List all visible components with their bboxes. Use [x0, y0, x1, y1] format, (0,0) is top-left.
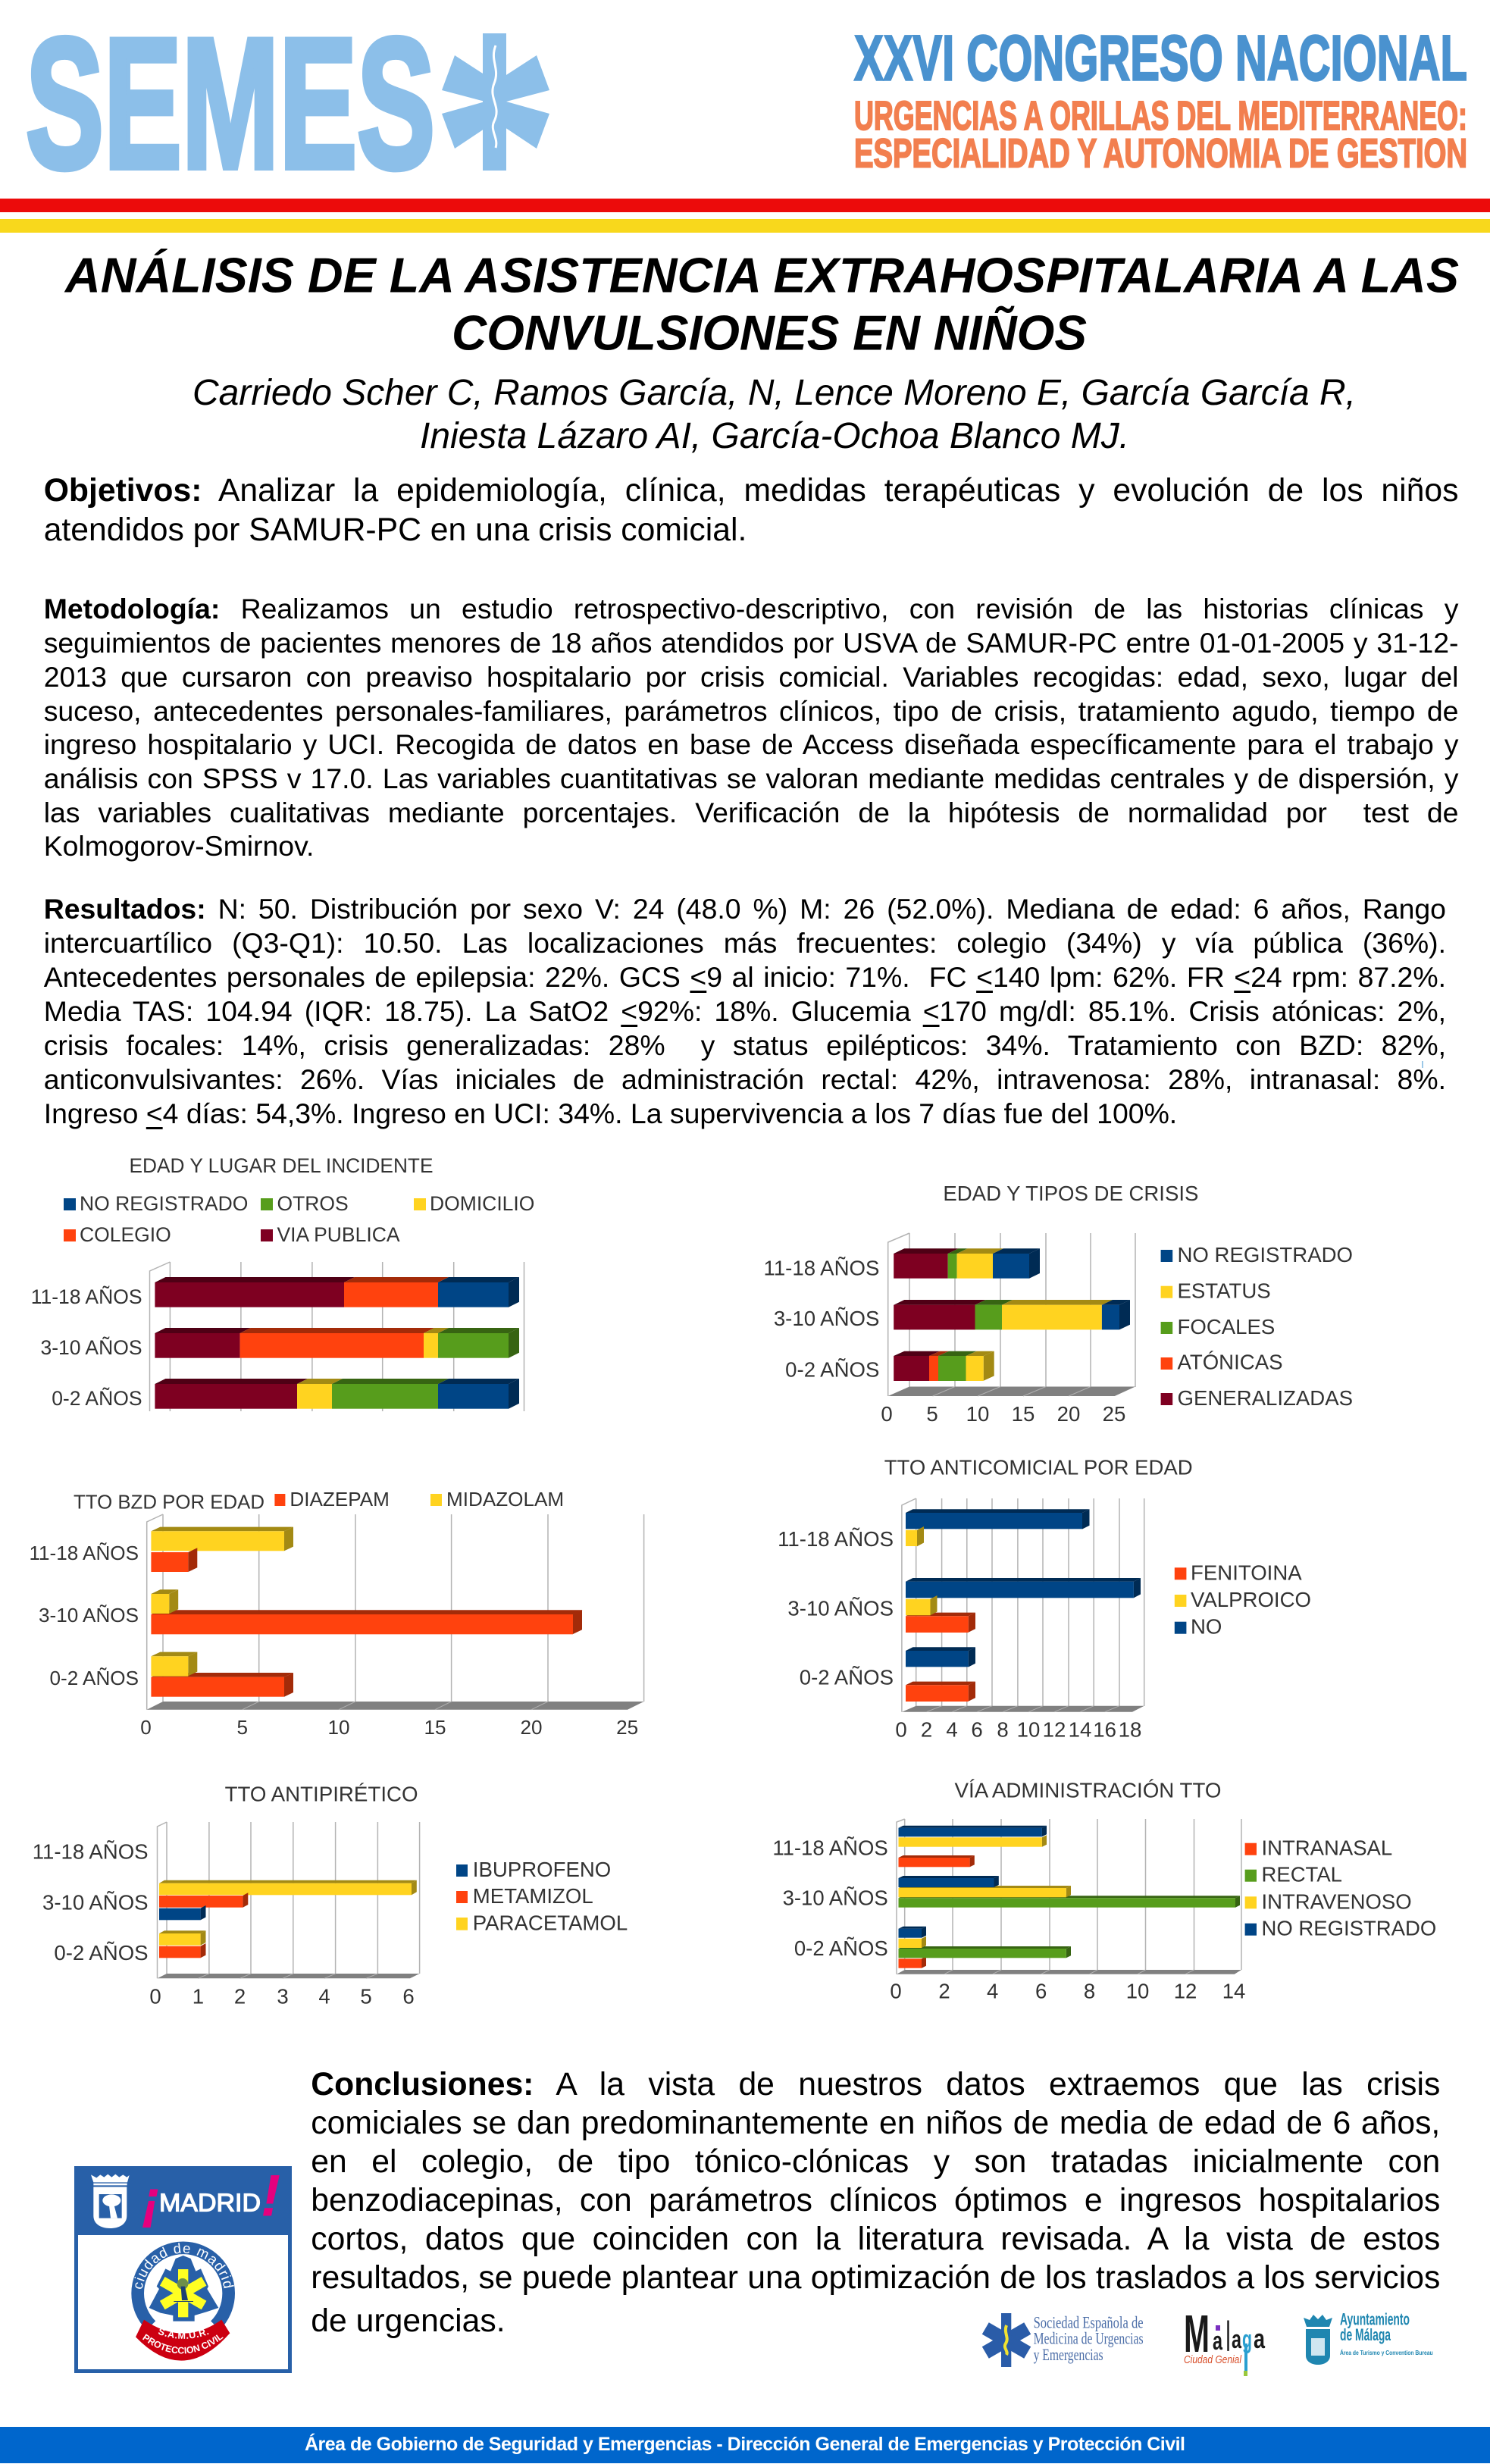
- axis labels: 8: [997, 1718, 1009, 1742]
- small blue mark: [1422, 1061, 1423, 1068]
- legend: NO REGISTRADO: [1178, 1243, 1353, 1266]
- axis labels: [895, 1718, 1141, 1742]
- bar: 0-2 años: [894, 1351, 994, 1381]
- category labels: 11-18 AÑOS: [772, 1836, 888, 1859]
- axis labels: 2: [234, 1984, 246, 2008]
- logo: málaga ciudad genial: l: [1226, 2312, 1230, 2360]
- bar: 3-10 años midazolam: [151, 1589, 178, 1614]
- authors: Carriedo Scher C, Ramos García, N, Lence Moreno E, García García R,: [193, 372, 1356, 413]
- floor: [888, 1387, 1135, 1396]
- text block: conclusiones: [311, 2066, 1440, 2339]
- bar: 11-18 años no registrado: [899, 1826, 1047, 1836]
- category labels: 0-2 AÑOS: [794, 1936, 888, 1960]
- bar: 3-10 años no registrado: [899, 1876, 999, 1887]
- logo: ayuntamiento de málaga: de Málaga: [1340, 2325, 1391, 2344]
- bar: 3-10 años valproico: [906, 1595, 937, 1615]
- text block: metodología: 2013 que cursaron con preaviso hospitalario por crisis comicial. Variables recogidas: edad, sexo, lugar del: [44, 661, 1458, 693]
- axis labels: [149, 1984, 415, 2008]
- text block: resultados: crisis focales: 14%, crisis generalizadas: 28% y status epilépticos: 34%. Tratamiento con BZD: 82%,: [44, 1029, 1446, 1061]
- logo: málaga ciudad genial: Ciudad Genial: [1184, 2353, 1242, 2366]
- axis labels: 5: [926, 1402, 938, 1426]
- text block: resultados: anticonvulsivantes: 26%. Vías iniciales de administración rectal: 42%, intravenosa: 28%, intranasal: 8%.: [44, 1063, 1446, 1095]
- chart title: VÍA ADMINISTRACIÓN TTO: [955, 1779, 1222, 1802]
- chart title: TTO ANTIPIRÉTICO: [225, 1783, 418, 1806]
- gridlines: [147, 1514, 644, 1710]
- icon: blue star of life: [982, 2313, 1031, 2367]
- text block: objetivos: Objetivos: Analizar la epidemiología, clínica, medidas terapéuticas y evolución de los niños: [44, 472, 1458, 509]
- title: ANÁLISIS DE LA ASISTENCIA EXTRAHOSPITALARIA A LAS: [64, 249, 1459, 303]
- bar: 3-10 años paracetamol: [159, 1880, 417, 1895]
- bar: 0-2 años: [155, 1379, 519, 1409]
- banner text: S.A.M.U.R.: [158, 2328, 209, 2339]
- text block: conclusiones: cortos, datos que coinciden con la literatura revisada. A la vista de estos: [311, 2221, 1440, 2257]
- chart title: TTO BZD POR EDAD: [74, 1491, 265, 1514]
- bar: 0-2 años intravenoso: [899, 1936, 926, 1948]
- authors: Iniesta Lázaro AI, García-Ochoa Blanco MJ.: [420, 415, 1129, 456]
- samur ring: [138, 2248, 229, 2325]
- legend: [1161, 1243, 1353, 1410]
- chart: vía administración tto: [772, 1779, 1436, 2003]
- legend: NO REGISTRADO: [1261, 1917, 1436, 1940]
- logo: málaga ciudad genial: a: [1254, 2323, 1266, 2354]
- text block: objetivos: atendidos por SAMUR-PC en una crisis comicial.: [44, 512, 747, 548]
- floor: [147, 1702, 644, 1710]
- axis labels: 6: [402, 1984, 415, 2008]
- axis labels: 4: [318, 1984, 330, 2008]
- category labels: [31, 1285, 142, 1410]
- legend: INTRAVENOSO: [1261, 1889, 1412, 1913]
- axis labels: 14: [1069, 1718, 1091, 1742]
- category labels: 0-2 AÑOS: [800, 1666, 894, 1689]
- category labels: 3-10 AÑOS: [39, 1604, 139, 1626]
- axis labels: 10: [327, 1716, 350, 1739]
- legend: [274, 1488, 564, 1511]
- text block: metodología: las variables cualitativas mediante porcentajes. Verificación de la hipótesis de normalidad por test de: [44, 797, 1458, 828]
- text block: objetivos: [44, 472, 1458, 548]
- bar: 0-2 años no registrado: [899, 1927, 926, 1938]
- text block: metodología: suceso, antecedentes personales-familiares, parámetros clínicos, tipo de crisis, tratamiento agudo, tiempo de: [44, 694, 1458, 726]
- legend: DIAZEPAM: [290, 1488, 390, 1511]
- ring text: ciudad de madrid: [134, 2243, 234, 2289]
- banner text: PROTECCION CIVIL: [142, 2334, 224, 2354]
- legend: METAMIZOL: [473, 1884, 593, 1908]
- text block: conclusiones: Conclusiones: A la vista de nuestros datos extraemos que las crisis: [311, 2066, 1440, 2102]
- axis labels: 12: [1174, 1980, 1197, 2003]
- axis labels: 10: [1126, 1980, 1149, 2003]
- axis labels: 2: [921, 1718, 932, 1742]
- bar: 3-10 años rectal: [899, 1896, 1240, 1908]
- frame: [74, 2166, 292, 2373]
- axis labels: 14: [1222, 1980, 1245, 2003]
- logo: málaga ciudad genial: g: [1242, 2325, 1252, 2354]
- text block: metodología: Metodología: Realizamos un estudio retrospectivo-descriptivo, con revisión de las historias clínicas y: [44, 593, 1458, 625]
- bar: 11-18 años intravenoso: [899, 1835, 1047, 1847]
- axis labels: 15: [1012, 1402, 1035, 1426]
- gridlines: [158, 1822, 420, 1978]
- category labels: 11-18 AÑOS: [33, 1840, 149, 1864]
- logo: málaga ciudad genial: a: [1232, 2325, 1242, 2354]
- bar: 3-10 años metamizol: [159, 1893, 248, 1908]
- bar: 11-18 años no: [906, 1509, 1090, 1529]
- legend: [1175, 1561, 1311, 1639]
- axis labels: 1: [193, 1984, 204, 2008]
- legend: PARACETAMOL: [473, 1911, 628, 1935]
- legend: NO: [1191, 1615, 1222, 1639]
- text block: metodología: ingreso hospitalario y UCI. Recogida de datos en base de Access diseñada específicamente para el trabajo y: [44, 728, 1458, 760]
- legend: RECTAL: [1261, 1863, 1342, 1886]
- category labels: 11-18 AÑOS: [31, 1285, 142, 1308]
- legend: MIDAZOLAM: [446, 1488, 564, 1511]
- legend: GENERALIZADAS: [1178, 1386, 1353, 1410]
- bar: 3-10 años: [155, 1328, 519, 1358]
- chart: tto bzd por edad: [29, 1488, 644, 1739]
- axis labels: 0: [149, 1984, 161, 2008]
- logo: ayuntamiento de málaga: Área de Turismo y Convention Bureau: [1340, 2350, 1433, 2356]
- floor: [158, 1974, 420, 1978]
- axis labels: 0: [140, 1716, 152, 1739]
- bar: 11-18 años valproico: [906, 1526, 924, 1546]
- bar: 3-10 años intravenoso: [899, 1886, 1071, 1897]
- axis labels: 20: [520, 1716, 543, 1739]
- category labels: 0-2 AÑOS: [785, 1358, 879, 1382]
- category labels: 11-18 AÑOS: [764, 1257, 879, 1280]
- bar: 0-2 años fenitoina: [906, 1682, 975, 1702]
- bar: 3-10 años diazepam: [151, 1610, 583, 1634]
- bear and tree figure: [174, 2278, 193, 2302]
- society name: y Emergencias: [1034, 2345, 1103, 2364]
- axis labels: 6: [971, 1718, 983, 1742]
- logo: SEMES: SEMES: [26, 0, 435, 207]
- text block: conclusiones: comiciales se dan predominantemente en niños de media de edad de 6 años,: [311, 2105, 1440, 2141]
- text block: resultados: Media TAS: 104.94 (IQR: 18.75). La SatO2 <92%: 18%. Glucemia <170 mg/dl: 85.1%. Crisis atónicas: 2%,: [44, 995, 1446, 1027]
- category labels: 3-10 AÑOS: [774, 1307, 879, 1330]
- axis labels: [881, 1402, 1125, 1426]
- gridlines: [888, 1233, 1135, 1396]
- axis labels: 20: [1057, 1402, 1080, 1426]
- legend: NO REGISTRADO: [80, 1192, 248, 1215]
- legend: OTROS: [277, 1192, 349, 1215]
- bar: 0-2 años paracetamol: [159, 1930, 206, 1946]
- category labels: 0-2 AÑOS: [50, 1667, 139, 1689]
- icon: star of life: [442, 33, 549, 171]
- chart: tto antipirético: [33, 1783, 628, 2008]
- category labels: [33, 1840, 149, 1965]
- chart: tto anticomicial por edad: [778, 1456, 1311, 1742]
- text block: resultados: intercuartílico (Q3-Q1): 10.50. Las localizaciones más frecuentes: colegio (34%) y vía pública (36%).: [44, 927, 1446, 959]
- category labels: 3-10 AÑOS: [40, 1336, 142, 1359]
- gridlines: [150, 1262, 524, 1411]
- logo: málaga ciudad genial: [1184, 2304, 1266, 2376]
- text block: metodología: [44, 593, 1458, 862]
- legend: ATÓNICAS: [1178, 1351, 1283, 1374]
- society name: Medicina de Urgencias: [1034, 2329, 1144, 2348]
- logo: málaga ciudad genial: M: [1184, 2304, 1210, 2363]
- bar: 0-2 años midazolam: [151, 1652, 197, 1677]
- wordmark: madrid: MADRID: [159, 2190, 261, 2218]
- bar: 0-2 años intranasal: [899, 1956, 926, 1968]
- title: [64, 249, 1459, 360]
- text block: conclusiones: benzodiacepinas, con parámetros clínicos óptimos e ingresos hospitalarios: [311, 2182, 1440, 2218]
- category labels: 11-18 AÑOS: [778, 1527, 894, 1551]
- axis labels: [140, 1716, 638, 1739]
- chart title: EDAD Y LUGAR DEL INCIDENTE: [129, 1154, 434, 1177]
- axis labels: 18: [1119, 1718, 1141, 1742]
- text block: metodología: seguimientos de pacientes menores de 18 años atendidos por USVA de SAMUR-PC entre 01-01-2005 y 31-12-: [44, 627, 1458, 659]
- axis labels: 25: [1103, 1402, 1125, 1426]
- yellow band: [0, 219, 1490, 233]
- pink exclamation marks: ¡: [142, 2168, 161, 2231]
- bar: 11-18 años: [894, 1248, 1040, 1279]
- axis labels: 12: [1043, 1718, 1066, 1742]
- category labels: [764, 1257, 879, 1382]
- axis labels: 3: [277, 1984, 289, 2008]
- floor: [902, 1706, 1144, 1712]
- gridlines: [897, 1819, 1241, 1974]
- samur tree emblem: [149, 2256, 218, 2322]
- footer: [0, 2427, 1490, 2463]
- bar: 11-18 años: [155, 1277, 519, 1307]
- bar: 3-10 años: [894, 1300, 1130, 1329]
- axis labels: 0: [895, 1718, 907, 1742]
- chart: edad y tipos de crisis: [764, 1182, 1353, 1426]
- category labels: 11-18 AÑOS: [29, 1542, 139, 1564]
- axis labels: 25: [616, 1716, 638, 1739]
- footer: Área de Gobierno de Seguridad y Emergencias - Dirección General de Emergencias y Protección Civil: [305, 2433, 1185, 2455]
- category labels: [29, 1542, 139, 1689]
- text block: conclusiones: de urgencias.: [311, 2303, 506, 2339]
- axis labels: 8: [1084, 1980, 1095, 2003]
- category labels: 0-2 AÑOS: [52, 1387, 142, 1410]
- category labels: 0-2 AÑOS: [54, 1941, 149, 1965]
- axis labels: 15: [424, 1716, 446, 1739]
- legend: [1245, 1836, 1436, 1940]
- red band: [0, 199, 1490, 212]
- axis labels: 5: [236, 1716, 248, 1739]
- category labels: 3-10 AÑOS: [787, 1597, 894, 1620]
- axis labels: 10: [1017, 1718, 1040, 1742]
- text block: metodología: Kolmogorov-Smirnov.: [44, 830, 314, 862]
- bar: 0-2 años rectal: [899, 1946, 1071, 1958]
- text block: resultados: [44, 893, 1446, 1129]
- bar: 3-10 años no: [906, 1578, 1141, 1598]
- society name: Sociedad Española de: [1034, 2313, 1144, 2332]
- text block: resultados: Antecedentes personales de epilepsia: 22%. GCS <9 al inicio: 71%. FC <140 lpm: 62%. FR <24 rpm: 87.2%.: [44, 961, 1446, 993]
- floor: [897, 1970, 1241, 1974]
- gridlines: [902, 1498, 1144, 1712]
- legend: VALPROICO: [1191, 1588, 1311, 1611]
- axis labels: 6: [1035, 1980, 1047, 2003]
- legend: [456, 1858, 628, 1935]
- axis labels: 16: [1093, 1718, 1116, 1742]
- category labels: [778, 1527, 894, 1689]
- bar: 11-18 años diazepam: [151, 1548, 197, 1572]
- logo: ayuntamiento de málaga: [1304, 2310, 1433, 2365]
- authors: [193, 372, 1356, 456]
- legend: VIA PUBLICA: [277, 1223, 400, 1246]
- red banner: [136, 2320, 230, 2361]
- text block: conclusiones: en el colegio, de tipo tónico-clónicas y son tratadas inicialmente con: [311, 2143, 1440, 2180]
- text block: resultados: Resultados: N: 50. Distribución por sexo V: 24 (48.0 %) M: 26 (52.0%). Mediana de edad: 6 años, Rango: [44, 893, 1446, 925]
- title: CONVULSIONES EN NIÑOS: [452, 305, 1087, 360]
- bar: 0-2 años metamizol: [159, 1943, 206, 1958]
- category labels: 3-10 AÑOS: [42, 1890, 149, 1914]
- logo: madrid samur: [74, 2162, 292, 2373]
- category labels: 3-10 AÑOS: [783, 1886, 888, 1909]
- legend: FENITOINA: [1191, 1561, 1302, 1584]
- logo: ayuntamiento de málaga: Ayuntamiento: [1340, 2310, 1410, 2329]
- bar: 3-10 años fenitoina: [906, 1613, 975, 1633]
- icon: madrid crest: [91, 2174, 130, 2228]
- legend: INTRANASAL: [1261, 1836, 1392, 1860]
- chart title: TTO ANTICOMICIAL POR EDAD: [884, 1456, 1193, 1479]
- axis labels: 10: [966, 1402, 989, 1426]
- chart title: EDAD Y TIPOS DE CRISIS: [943, 1182, 1198, 1205]
- heading: congress name: [854, 23, 1467, 176]
- axis labels: 0: [890, 1980, 902, 2003]
- legend: COLEGIO: [80, 1223, 171, 1246]
- bar: 0-2 años diazepam: [151, 1673, 293, 1697]
- axis labels: [890, 1980, 1245, 2003]
- text block: conclusiones: resultados, se puede plantear una optimización de los traslados a los servicios: [311, 2259, 1440, 2296]
- star of life: [160, 2269, 206, 2317]
- axis labels: 4: [946, 1718, 958, 1742]
- legend: IBUPROFENO: [473, 1858, 611, 1881]
- text block: resultados: Ingreso <4 días: 54,3%. Ingreso en UCI: 34%. La supervivencia a los 7 días fue del 100%.: [44, 1097, 1177, 1129]
- bar: 11-18 años intranasal: [899, 1855, 975, 1867]
- chart: edad y lugar del incidente: [31, 1154, 534, 1411]
- legend: FOCALES: [1178, 1315, 1275, 1338]
- pink exclamation marks: !: [261, 2162, 280, 2228]
- text block: metodología: análisis con SPSS v 17.0. Las variables cuantitativas se valoran mediante medidas centrales y de dispersión, y: [44, 762, 1458, 794]
- axis labels: 5: [360, 1984, 372, 2008]
- legend: DOMICILIO: [430, 1192, 534, 1215]
- axis labels: 4: [987, 1980, 998, 2003]
- bar: 3-10 años ibuprofeno: [159, 1905, 206, 1920]
- society name: [1034, 2313, 1144, 2364]
- legend: [64, 1192, 534, 1246]
- bar: 11-18 años midazolam: [151, 1527, 293, 1551]
- axis labels: 2: [938, 1980, 950, 2003]
- bar: 0-2 años no: [906, 1647, 975, 1667]
- pink exclamation marks: [142, 2162, 280, 2231]
- logo: sociedad española de medicina de urgencias: [982, 2313, 1144, 2367]
- axis labels: 0: [881, 1402, 893, 1426]
- category labels: [772, 1836, 888, 1960]
- icon: crest: [1304, 2315, 1332, 2365]
- legend: ESTATUS: [1178, 1279, 1271, 1302]
- logo: málaga ciudad genial: a: [1213, 2327, 1223, 2356]
